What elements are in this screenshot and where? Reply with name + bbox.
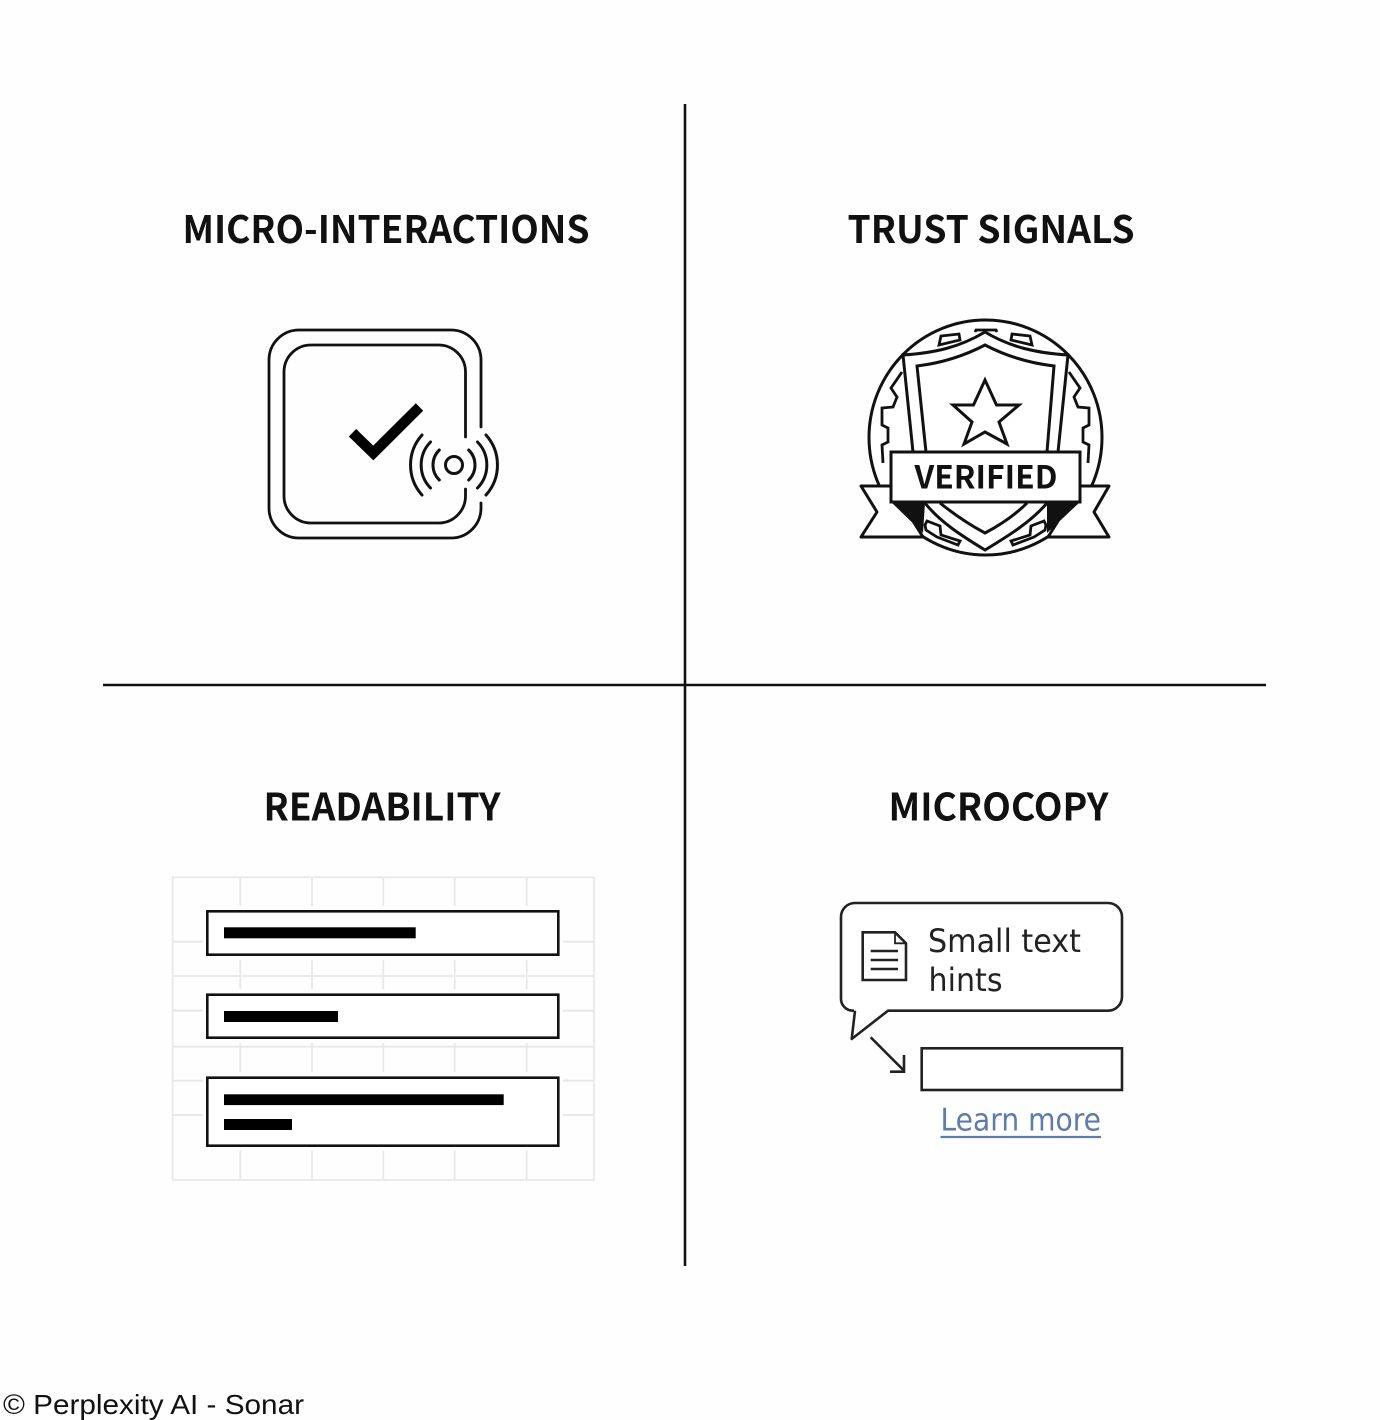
badge circle: [869, 320, 1102, 555]
heading: trust signals: TRUST SIGNALS: [848, 199, 1134, 254]
ribbon fold left: [891, 502, 925, 533]
heading: micro-interactions: MICRO-INTERACTIONS: [182, 199, 590, 254]
verified label: VERIFIED: [914, 452, 1058, 498]
text block 1: [203, 906, 563, 960]
hint text: hints: [928, 961, 1002, 999]
arrow: [871, 1037, 904, 1072]
inner shield: [917, 345, 1054, 452]
left ribbon tail: [861, 486, 923, 537]
right ribbon tail: [1048, 486, 1109, 537]
checkmark: [352, 407, 420, 453]
heading: readability: READABILITY: [264, 776, 501, 832]
star: [953, 380, 1019, 444]
heading: microcopy: MICROCOPY: [888, 776, 1109, 832]
signal waves: [411, 435, 497, 495]
background grid: [173, 877, 594, 1180]
inner button outline: [284, 345, 466, 523]
hint text: [928, 922, 1081, 999]
icon: document: [863, 932, 906, 980]
hint text: Small text: [928, 922, 1081, 960]
illustration: microcopy hint bubble and input: [841, 903, 1122, 1138]
text block 2: [203, 989, 563, 1043]
learn more link: Learn more: [940, 1102, 1101, 1138]
gear teeth: [882, 330, 1089, 545]
icon: verified shield badge: [861, 320, 1109, 555]
illustration: readability text blocks on grid: [173, 877, 594, 1180]
ribbon fold right: [1047, 502, 1080, 533]
footer credit: © Perplexity AI - Sonar: [3, 1389, 304, 1420]
outer button outline: [269, 330, 481, 538]
text block 3: [203, 1072, 563, 1151]
speech bubble: [841, 903, 1122, 1039]
outer shield: [903, 332, 1068, 452]
icon: tappable button with checkmark and signal waves: [269, 330, 497, 538]
verified banner: [891, 452, 1080, 502]
input field: [922, 1048, 1122, 1090]
